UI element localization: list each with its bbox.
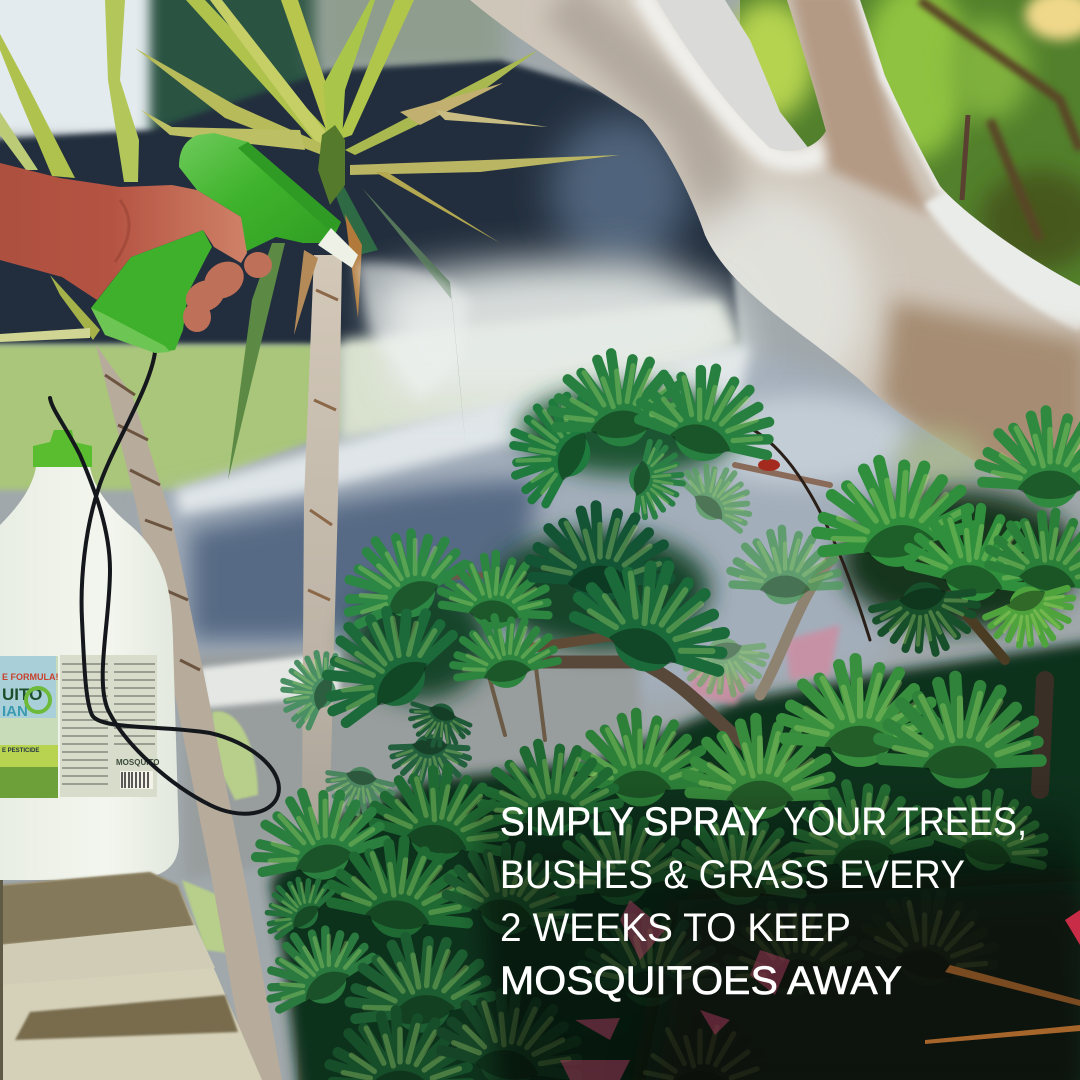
background: blue car lower body [190, 480, 540, 640]
palm leaves [135, 0, 620, 480]
spray gun nozzle [318, 228, 358, 268]
bottle rear label [60, 655, 159, 797]
stone wall [0, 872, 262, 1080]
bottle front label: UITO [2, 685, 42, 704]
bottle cap [33, 430, 92, 467]
background: hazy grey-blue area [150, 350, 900, 700]
bottle body [0, 467, 179, 880]
background: dark building [0, 60, 740, 350]
palm trunk right [298, 255, 342, 1080]
pink and orange leaf accents [560, 900, 1080, 1080]
top right foliage [725, 0, 1080, 300]
bush foliage tufts: right cluster [807, 411, 1080, 662]
back branch [655, 0, 810, 155]
bottle front label [0, 656, 58, 798]
bottle [0, 430, 179, 880]
spray stream [355, 262, 470, 400]
background: pale kerb stripe [200, 652, 340, 708]
background: dark trees behind palm [150, 0, 320, 135]
dark shade lower right [640, 880, 1080, 1080]
background: pale lawn haze [340, 300, 740, 440]
arm and hand [0, 163, 272, 332]
spray gun grip base [91, 308, 170, 353]
background: bluish haze on building [550, 115, 690, 265]
palm trunk right bark [308, 290, 338, 600]
dark shade behind caption [470, 780, 1080, 1080]
bottle front label: E FORMULA! [2, 672, 58, 682]
palm trunk left [96, 345, 282, 1080]
spray mist [375, 260, 985, 490]
bottle rear label: MOSQUITO [116, 758, 159, 767]
branches [425, 428, 1045, 790]
hose [50, 352, 279, 814]
caption: spray instructions: 2 WEEKS TO KEEP [500, 906, 851, 950]
bottle front label: IAN [2, 703, 28, 720]
background: sky [0, 0, 160, 135]
background: white car roof line [175, 345, 750, 515]
spray gun [179, 133, 358, 268]
main bush dark mass [270, 385, 1080, 1080]
caption: spray instructions: BUSHES & GRASS EVERY [500, 853, 965, 897]
insect on branch [758, 459, 780, 471]
bush foliage tufts: upper cluster [298, 347, 785, 755]
palm trunk left bark [105, 375, 200, 670]
spray gun grip [91, 230, 212, 352]
background: distant hazy foliage [315, 0, 505, 70]
bush foliage tufts: lower cluster [243, 659, 1058, 1080]
bush foliage tufts: pale hazy cluster [271, 450, 840, 819]
background: lawn [0, 345, 340, 490]
spray gun head [179, 133, 341, 252]
fingers [181, 252, 272, 332]
palm leaves left [0, 0, 139, 342]
caption: spray instructions [500, 800, 1027, 1003]
white tree trunk and branches [460, 0, 1080, 500]
caption: spray instructions: SIMPLY SPRAY [500, 800, 767, 844]
caption: spray instructions: MOSQUITOES AWAY [500, 959, 902, 1003]
dead twig [962, 115, 968, 200]
background: small shrub behind palm [182, 711, 258, 955]
caption: spray instructions: YOUR TREES, [783, 800, 1027, 844]
bottle front label: E PESTICIDE [2, 748, 39, 754]
background: grey road [185, 640, 640, 880]
